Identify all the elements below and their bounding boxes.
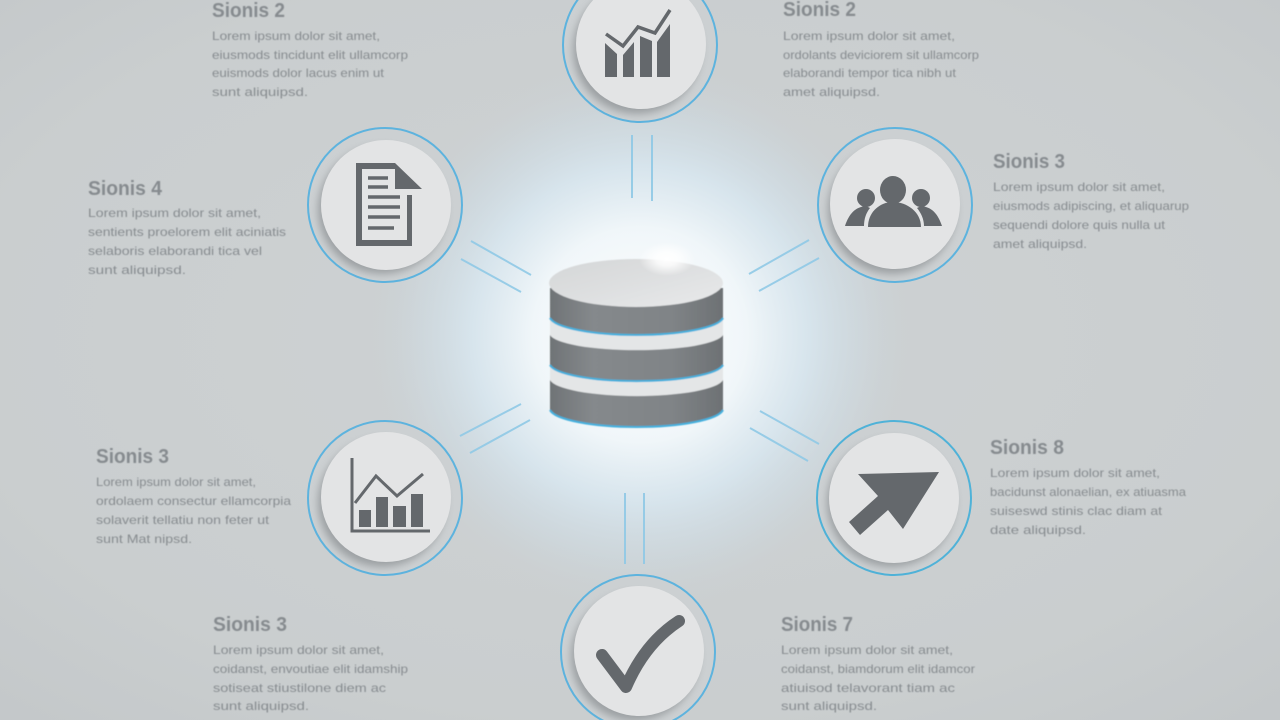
text: upper left block: sunt aliquipsd. bbox=[88, 263, 186, 277]
icon: group of people bbox=[845, 176, 942, 227]
text: lower left block: Sionis 3 bbox=[96, 446, 169, 468]
text: top left block: euismods dolor lacus enim ut bbox=[212, 66, 385, 80]
text: bottom right block bbox=[781, 614, 975, 713]
text: upper left block bbox=[88, 178, 286, 277]
text: bottom right block: Sionis 7 bbox=[781, 614, 853, 636]
text: top left block bbox=[212, 0, 408, 99]
text: lower right block: suiseswd stinis clac diam at bbox=[990, 504, 1163, 518]
text: lower right block: Lorem ipsum dolor sit amet, bbox=[990, 466, 1160, 480]
node: upper right, people bbox=[818, 128, 972, 282]
text: upper right block bbox=[993, 151, 1189, 251]
text: top left block: sunt aliquipsd. bbox=[212, 85, 308, 99]
text: upper left block: Sionis 4 bbox=[88, 178, 163, 200]
database cylinder icon bbox=[549, 259, 723, 427]
text: upper right block: Sionis 3 bbox=[993, 151, 1065, 173]
node: bottom, check mark bbox=[561, 575, 715, 720]
text: bottom right block: sunt aliquipsd. bbox=[781, 699, 877, 713]
node: top, growth chart bbox=[563, 0, 717, 122]
bottom disk bbox=[550, 380, 723, 427]
text: top left block: Sionis 2 bbox=[212, 0, 285, 22]
text: top left block: Lorem ipsum dolor sit amet, bbox=[212, 29, 380, 43]
text: top right block bbox=[783, 0, 979, 99]
text: bottom right block: atiuisod telavorant tiam ac bbox=[781, 681, 955, 695]
text: lower right block: date aliquipsd. bbox=[990, 523, 1086, 537]
text: bottom left block: Lorem ipsum dolor sit amet, bbox=[213, 643, 384, 657]
middle disk bbox=[550, 335, 723, 381]
text: upper right block: amet aliquipsd. bbox=[993, 237, 1087, 251]
highlight sparkle bbox=[639, 242, 695, 276]
icon: bar chart with trend line bbox=[605, 10, 670, 77]
text: lower left block: solaverit tellatiu non feter ut bbox=[96, 513, 270, 527]
text: top left block: eiusmods tincidunt elit ullamcorp bbox=[212, 48, 408, 62]
text: upper left block: selaboris elaborandi tica vel bbox=[88, 244, 262, 258]
text: bottom right block: coidanst, biamdorum elit idamcor bbox=[781, 662, 975, 676]
text: lower left block: sunt Mat nipsd. bbox=[96, 532, 192, 546]
text: lower left block: Lorem ipsum dolor sit amet, bbox=[96, 475, 256, 489]
node: lower right, arrow bbox=[817, 421, 971, 575]
text: top right block: ordolants deviciorem sit ullamcorp bbox=[783, 48, 979, 62]
text: bottom left block: coidanst, envoutiae elit idamship bbox=[213, 662, 408, 676]
node: lower left, line and bar chart bbox=[308, 421, 462, 575]
text: top right block: elaborandi tempor tica nibh ut bbox=[783, 66, 957, 80]
text: top right block: amet aliquipsd. bbox=[783, 85, 880, 99]
connector lines bbox=[460, 135, 819, 564]
text: upper left block: Lorem ipsum dolor sit amet, bbox=[88, 206, 261, 220]
icon: chart with axes bbox=[352, 458, 430, 531]
text: bottom left block: sotiseat stiustilone diem ac bbox=[213, 681, 386, 695]
text: bottom left block: sunt aliquipsd. bbox=[213, 699, 309, 713]
text: top right block: Lorem ipsum dolor sit amet, bbox=[783, 29, 955, 43]
text: bottom left block: Sionis 3 bbox=[213, 614, 287, 636]
text: upper right block: eiusmods adipiscing, et aliquarup bbox=[993, 199, 1189, 213]
text: upper right block: sequendi dolore quis nulla ut bbox=[993, 218, 1166, 232]
text: lower right block bbox=[990, 437, 1186, 537]
icon: document bbox=[356, 163, 422, 246]
central glow bbox=[360, 55, 920, 615]
text: lower left block bbox=[96, 446, 291, 546]
text: lower left block: ordolaem consectur ellamcorpia bbox=[96, 494, 291, 508]
top disk bbox=[549, 259, 723, 335]
icon: check mark bbox=[602, 621, 679, 687]
text: lower right block: Sionis 8 bbox=[990, 437, 1064, 459]
text: bottom left block bbox=[213, 614, 408, 713]
text: upper right block: Lorem ipsum dolor sit amet, bbox=[993, 180, 1165, 194]
node: upper left, document bbox=[308, 128, 462, 282]
light bands between disks bbox=[550, 316, 723, 398]
text: upper left block: sentients proelorem elit aciniatis bbox=[88, 225, 286, 239]
icon: arrow bbox=[849, 472, 939, 535]
text: lower right block: bacidunst alonaelian, ex atiuasma bbox=[990, 485, 1186, 499]
text: bottom right block: Lorem ipsum dolor sit amet, bbox=[781, 643, 953, 657]
